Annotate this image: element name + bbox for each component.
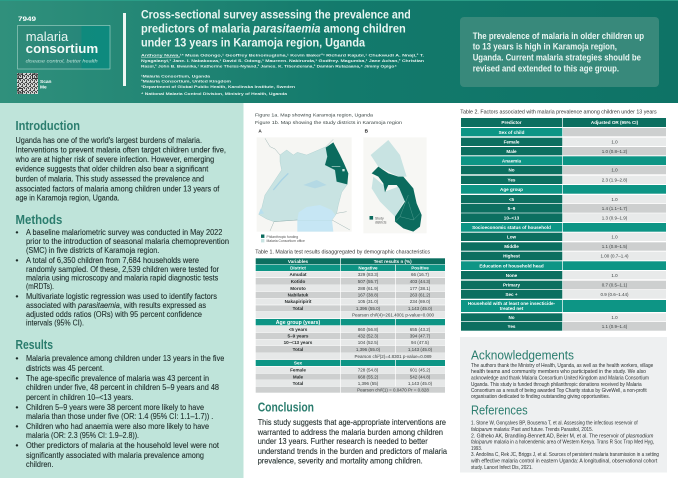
table 2 socioeconomic status rows: Middle <box>504 244 519 249</box>
table 2 socioeconomic status rows: 1.1 (0.8–1.5) <box>602 244 628 249</box>
table 2 education rows <box>461 261 666 299</box>
heading: methods: Methods <box>16 213 62 227</box>
table 2 sex and anaemia rows: Anaemia <box>502 158 522 163</box>
table 1 district rows: 1,143 (45.0) <box>408 306 433 311</box>
table 1 sex rows: Female <box>290 368 306 373</box>
text: references: 1993. <box>471 446 482 452</box>
title: under 13 years in Karamoja region, Uganda <box>141 36 365 50</box>
text: methods bullets: A baseline malariometric survey was conducted in May 2022 <box>26 227 223 237</box>
text: acknowledgements: organisation dedicated to finding outstanding giving opportunities. <box>471 394 610 400</box>
text: introduction <box>15 135 226 203</box>
affiliations: ³Department of Global Public Health, Karolinska Institute, Sweden <box>141 84 296 89</box>
header divider bar <box>123 13 126 86</box>
table 2 age group rows: 1.0 <box>611 197 618 202</box>
table 1 header: District <box>290 266 306 270</box>
table 1 sex rows: 668 (55.2) <box>358 374 379 379</box>
table 1 age group rows: 655 (43.2) <box>410 327 431 332</box>
table 2 education rows: 0.9 (0.6–1.44) <box>600 292 629 297</box>
text: results bullets: significantly associated with malaria prevalence among <box>26 450 204 460</box>
table 1 age group rows: Pearson chi²(2)=4.8301 p-value=0.089 <box>354 354 432 359</box>
table 1: malaria test results <box>256 258 445 393</box>
text: acknowledgements: Consortium as a result of being awarded Top Charity status by GiveWell, a non-profit <box>471 388 647 394</box>
text: results bullets: Malaria prevalence among children under 13 years in the five <box>26 353 225 363</box>
table 2 education rows: 1.0 <box>611 273 618 278</box>
text: introduction: evidence suggests that older children also bear a significant <box>16 163 209 173</box>
text: methods bullets: associated with parasitaemia, with results expressed as <box>26 300 206 310</box>
table 1 age group rows: 860 (56.8) <box>358 327 379 332</box>
text: results bullets: children under five, 48 percent in children 5–9 years and 48 <box>26 382 219 392</box>
map A legend <box>261 234 305 243</box>
poster number: 7949 <box>18 16 37 23</box>
title: Cross-sectional survey assessing the prevalence and <box>141 8 411 22</box>
table 1 district rows: Nakapiripirit <box>285 299 312 304</box>
authors: Nyagalanyi,¹ Jane. I. Nabakooza,¹ David S. Odong,¹ Maureen. Nakirunda,¹ Godfrey. Magumba,¹ Jane Achan,² Christian <box>141 58 425 63</box>
table 1 age group rows: Total <box>293 347 303 352</box>
table 2 socioeconomic status rows <box>461 223 666 260</box>
table 1 header: Positive <box>411 266 429 270</box>
text: methods bullets: (SMC) in five districts of Karamoja region. <box>26 245 159 255</box>
text: conclusion: warranted to address the malaria burden among children <box>257 427 443 437</box>
text: references: with effective malaria control in eastern Uganda: A longitudinal, observational cohort <box>471 459 658 465</box>
table 1 district rows: 177 (38.1) <box>410 286 431 291</box>
text: methods bullets: • <box>16 255 18 265</box>
table 1 district rows: 66 (16.7) <box>411 272 430 277</box>
affiliations: ²Malaria Consortium, United Kingdom <box>141 79 232 84</box>
key message callout: The prevalence of malaria in older children up <box>473 31 644 41</box>
panel: acknowledgements and references <box>460 337 667 472</box>
table 1 district rows: 403 (44.3) <box>410 279 431 284</box>
table 2 sex and anaemia rows: No <box>508 168 515 173</box>
text: results bullets: Children who had anaemia were also more likely to have <box>26 421 209 431</box>
table 1 age group rows: 394 (47.7) <box>410 334 431 339</box>
table 1 district rows: 263 (61.2) <box>410 293 431 298</box>
text: methods bullets: Multivariate logistic regression was used to identify factors <box>26 291 217 301</box>
table 2 age group rows: 1.3 (0.9–1.9) <box>602 215 628 220</box>
table 2 sex and anaemia rows: 2.3 (1.9–2.8) <box>602 178 628 182</box>
table 2 insecticide-treated net rows: treated net <box>500 306 524 311</box>
table 2 sex and anaemia rows: 1.0 <box>611 140 618 144</box>
text: results bullets: The age-specific prevalence of malaria was 43 percent in <box>26 373 209 383</box>
text: results bullets: children. <box>26 459 54 469</box>
table 1 age group rows: 1,396 (55.0) <box>356 347 381 352</box>
table 1 district rows <box>256 271 445 318</box>
table 1 header: Negative <box>358 266 378 270</box>
text: references: 1. Stone W, Gonçalves BP, Bousema T, et al. Assessing the infectious reservoir of <box>471 421 638 427</box>
table 1 age group rows: Age group (years) <box>276 320 320 326</box>
title <box>141 8 411 50</box>
text: references: study. Lancet Infect Dis, 2021. <box>471 465 533 471</box>
affiliations <box>141 74 296 96</box>
scan me label: Scan <box>40 79 52 85</box>
table 1 age group rows <box>256 319 445 360</box>
table 1 age group rows: 10–<13 years <box>284 340 313 345</box>
text: results bullets <box>16 353 225 469</box>
table 2 sex and anaemia rows: Yes <box>508 178 516 182</box>
table 1 district rows: 167 (38.8) <box>358 293 379 298</box>
table 1 district rows: Moroto <box>290 286 306 291</box>
table 1 sex rows: Pearson chi²(1) = 0.0470 Pr = 0.828 <box>357 387 429 392</box>
map B legend <box>370 216 387 225</box>
table 1 sex rows: 601 (45.2) <box>410 368 431 373</box>
table 2 age group rows <box>461 185 666 222</box>
key message callout: revised and extended to this age group. <box>473 64 619 74</box>
text: methods bullets: (mRDTs). <box>26 281 54 291</box>
text: results bullets: malaria (OR: 2.3 (95% CI: 1.9–2.8)). <box>26 430 139 440</box>
table 1 district rows: 234 (69.0) <box>410 299 431 304</box>
text: methods bullets: • <box>16 291 18 301</box>
text: results bullets: districts was 45 percent. <box>26 363 104 373</box>
logo: malaria consortium <box>18 26 110 69</box>
map B: study districts: B <box>365 128 369 133</box>
affiliations: ¹Malaria Consortium, Uganda <box>141 74 211 79</box>
text: methods bullets: adjusted odds ratios (ORs) with 95 percent confidence <box>26 309 202 319</box>
logo: malaria consortium: malaria <box>26 29 69 44</box>
text: results bullets: • <box>16 402 18 412</box>
text: references: 2. Githeko AK, Brandling-Bennett AD, Beier M, et al. The reservoir of plasmodium <box>471 434 654 440</box>
table 1 sex rows <box>256 360 445 393</box>
text: acknowledgements: The authors thank the Ministry of Health, Uganda, as well as the health workers, village <box>471 363 653 369</box>
text: introduction: who are at higher risk of severe infection. However, emerging <box>15 154 214 164</box>
table 1 age group rows: 94 (47.5) <box>411 340 430 345</box>
text: results bullets: • <box>16 440 18 450</box>
text: conclusion <box>257 417 447 466</box>
title: predictors of malaria parasitaemia among children <box>141 22 406 36</box>
heading: introduction: Introduction <box>16 119 80 133</box>
table 1 district rows: Total <box>293 306 303 311</box>
text: references: falciparum malaria in a holoendemic area of Western Kenya. Trans R Soc Trop Med Hyg, <box>471 440 654 446</box>
table 1 age group rows: <5 years <box>289 327 308 332</box>
text: introduction: associated factors of malaria among children under 13 years of <box>16 183 220 193</box>
text: introduction: burden of malaria. This study assessed the prevalence and <box>16 173 204 183</box>
figure captions: Figure 1a. Map showing Karamoja region, Uganda <box>255 113 373 119</box>
text: acknowledgements: Uganda. This study is funded through philanthropic donations received by Malaria <box>471 382 642 388</box>
table 1 district rows: Pearson chi²(4)=261.4001 p-value=0.000 <box>352 313 435 318</box>
text: methods bullets: • <box>16 227 18 237</box>
table 2 socioeconomic status rows: 1.00 (0.7–1.4) <box>600 254 629 259</box>
text: references: falciparum malaria: Past and future. Trends Parasitol, 2015. <box>471 427 593 433</box>
text: conclusion: prevalence, severity and mortality among children. <box>258 456 423 466</box>
table 1 caption: Table 1. Malaria test results disaggregated by demographic characteristics <box>255 249 431 255</box>
table 2 education rows: Education of household head <box>479 263 544 268</box>
table 1 age group rows: 432 (52.3) <box>358 334 379 339</box>
heading: results: Results <box>16 338 53 352</box>
table 1 header <box>256 258 445 271</box>
table 1 sex rows: 1,396 (55) <box>358 381 379 386</box>
table 2 caption: Table 2. Factors associated with malaria prevalence among children under 13 years <box>460 110 657 116</box>
map B legend: Study <box>375 216 384 220</box>
text: results bullets: • <box>16 373 18 383</box>
text: methods bullets: intervals (95% CI). <box>26 318 84 328</box>
key message callout: to 13 years is high in Karamoja region, <box>473 42 617 52</box>
table 2 insecticide-treated net rows: No <box>508 315 515 320</box>
table 2 education rows: Sec + <box>505 292 518 297</box>
table 1 header: Variables <box>288 259 309 264</box>
text: introduction: age in Karamoja region, Uganda. <box>16 193 120 203</box>
text: conclusion: understand trends in the burden and predictors of malaria <box>258 446 447 456</box>
text: results bullets: • <box>16 421 18 431</box>
table 2 sex and anaemia rows: Sex of child <box>499 130 525 135</box>
table 2 sex and anaemia rows <box>461 128 666 184</box>
text: references: 3. Andolina C, Rek JC, Briggs J, et al. Sources of persistent malaria transmission in a setting <box>471 452 659 458</box>
table 2 education rows: 0.7 (0.5–1.1) <box>602 283 628 288</box>
text: methods bullets <box>16 227 229 328</box>
table 2 sex and anaemia rows: Male <box>506 149 517 154</box>
authors: Anthony Nuwa, ¹* Musa Odongo,¹ Geoffrey Beinomugisha,¹ Kevin Baker²³ Richard Kajubi,¹ Chukwudi A. Nnaji,² T. <box>141 53 424 58</box>
map B: study districts <box>363 128 427 233</box>
map B legend: districts <box>375 221 387 225</box>
text: conclusion: under 13 years. Further research is needed to better <box>258 436 428 446</box>
table 1 sex rows: 728 (54.8) <box>358 368 379 373</box>
text: results bullets: Other predictors of malaria at the household level were not <box>26 440 220 450</box>
table 1 district rows: Kotido <box>291 279 305 284</box>
key message callout: Uganda. Current malaria strategies should be <box>473 53 641 63</box>
text: introduction: Uganda has one of the world's largest burdens of malaria. <box>16 135 202 145</box>
text: methods bullets: prior to the introduction of seasonal malaria chemoprevention <box>26 236 229 246</box>
text: acknowledgements <box>471 363 653 400</box>
table 1 district rows: Amudat <box>289 272 307 277</box>
text: results bullets: Children 5–9 years were 38 percent more likely to have <box>26 402 204 412</box>
authors <box>141 53 425 68</box>
table 2 header: Adjusted OR (95% CI) <box>591 120 639 125</box>
QR code <box>17 73 38 94</box>
panel: left column <box>0 103 244 478</box>
text: acknowledgements: acknowledge and thank Malaria Consortium United Kingdom and Malaria Consortium <box>471 376 649 382</box>
table 2 age group rows: <5 <box>509 197 515 202</box>
table 1 district rows: 105 (31.0) <box>358 299 379 304</box>
text: introduction: Interventions to prevent malaria often target children under five, <box>16 145 226 155</box>
table 1 sex rows: Sex <box>294 361 303 366</box>
table 1 sex rows: Total <box>293 381 303 386</box>
table 2 education rows: Primary <box>503 283 520 288</box>
table 2 header <box>461 118 666 127</box>
header band <box>0 0 678 103</box>
table 2 education rows: None <box>506 273 518 278</box>
scan me label: Me <box>40 85 47 91</box>
table 2 age group rows: Age group <box>500 187 523 192</box>
table 1 district rows: Nabilatuk <box>288 293 309 298</box>
table 1 sex rows: 1,143 (45.0) <box>408 381 433 386</box>
text: methods bullets: randomly sampled. Of these, 2,539 children were tested for <box>26 264 219 274</box>
table 2 socioeconomic status rows: Highest <box>503 254 520 259</box>
table 2 header: Predictor <box>501 120 522 125</box>
text: methods bullets: A total of 6,350 children from 7,684 households were <box>26 255 199 265</box>
table 1 age group rows: 104 (52.5) <box>358 340 379 345</box>
key message callout <box>460 17 659 87</box>
heading: acknowledgements: Acknowledgements <box>471 349 574 363</box>
authors: Rassi,² John B. Bwanika,¹ Katherine Theiss-Nyland,² James. K. Tibenderana,² Damian Rutazaana,⁴ Jimmy Opigo⁴ <box>141 63 397 68</box>
map A legend: Philanthropic funding <box>266 235 298 239</box>
table 2 age group rows: 1.4 (1.1–1.7) <box>602 206 628 211</box>
affiliations: ⁴ National Malaria Control Division, Ministry of Health, Uganda <box>141 91 288 96</box>
text: references <box>471 421 659 471</box>
table 2 sex and anaemia rows: 1.0 <box>611 168 618 173</box>
table 2 age group rows: 5–9 <box>508 206 516 211</box>
text: results bullets: malaria than those under five (OR: 1.4 (95% CI: 1.1–1.7)) . <box>26 411 213 421</box>
table 2 sex and anaemia rows: 1.0 (0.8–1.2) <box>602 149 628 154</box>
logo: malaria consortium: disease control, better health <box>26 59 98 64</box>
figure captions <box>255 113 402 126</box>
table 2 insecticide-treated net rows: Household with at least one insecticide- <box>468 301 556 306</box>
text: acknowledgements: health teams and community members who participated in the study. We also <box>471 369 646 375</box>
table 1 district rows: 329 (83.3) <box>358 272 379 277</box>
table 2 insecticide-treated net rows: 1.1 (0.9–1.4) <box>602 324 628 329</box>
table 1 sex rows: 542 (44.8) <box>410 374 431 379</box>
heading: conclusion: Conclusion <box>258 401 314 415</box>
logo: malaria consortium: consortium <box>26 41 98 56</box>
table 2 insecticide-treated net rows <box>461 300 666 331</box>
figure captions: Figure 1b. Map showing the study districts in Karamoja region <box>255 120 402 126</box>
heading: references: References <box>471 404 528 418</box>
table 1 age group rows: 1,143 (45.0) <box>408 347 433 352</box>
scan me label <box>40 79 52 91</box>
table 2: factors associated with malaria prevalence <box>461 118 666 331</box>
table 1 district rows: 507 (55.7) <box>358 279 379 284</box>
map A legend: Malaria Consortium office <box>266 239 305 243</box>
table 1 district rows: 288 (61.9) <box>358 286 379 291</box>
map A: Uganda with Karamoja highlighted <box>257 128 352 232</box>
text: results bullets: percent in children 10–<13 years. <box>26 392 133 402</box>
table 2 age group rows: 10–<13 <box>504 215 520 220</box>
text: methods bullets: malaria using microscopy and malaria rapid diagnostic tests <box>26 273 218 283</box>
table 2 sex and anaemia rows: Female <box>504 140 520 144</box>
table 1 district rows: 1,396 (55.0) <box>356 306 381 311</box>
table 2 insecticide-treated net rows: 1.0 <box>611 315 618 320</box>
table 1 age group rows: 5–9 years <box>288 334 309 339</box>
table 2 socioeconomic status rows: Socioeconomic status of household <box>472 225 551 230</box>
table 2 insecticide-treated net rows: Yes <box>508 324 516 329</box>
table 2 socioeconomic status rows: Low <box>507 234 517 240</box>
map A: Uganda with Karamoja highlighted: A <box>258 128 262 133</box>
text: results bullets: • <box>16 353 18 363</box>
table 2 socioeconomic status rows: 1.0 <box>611 234 618 240</box>
table 1 header: Test results n (%) <box>374 259 412 264</box>
table 1 sex rows: Male <box>293 374 304 379</box>
text: conclusion: This study suggests that age-appropriate interventions are <box>258 417 446 427</box>
